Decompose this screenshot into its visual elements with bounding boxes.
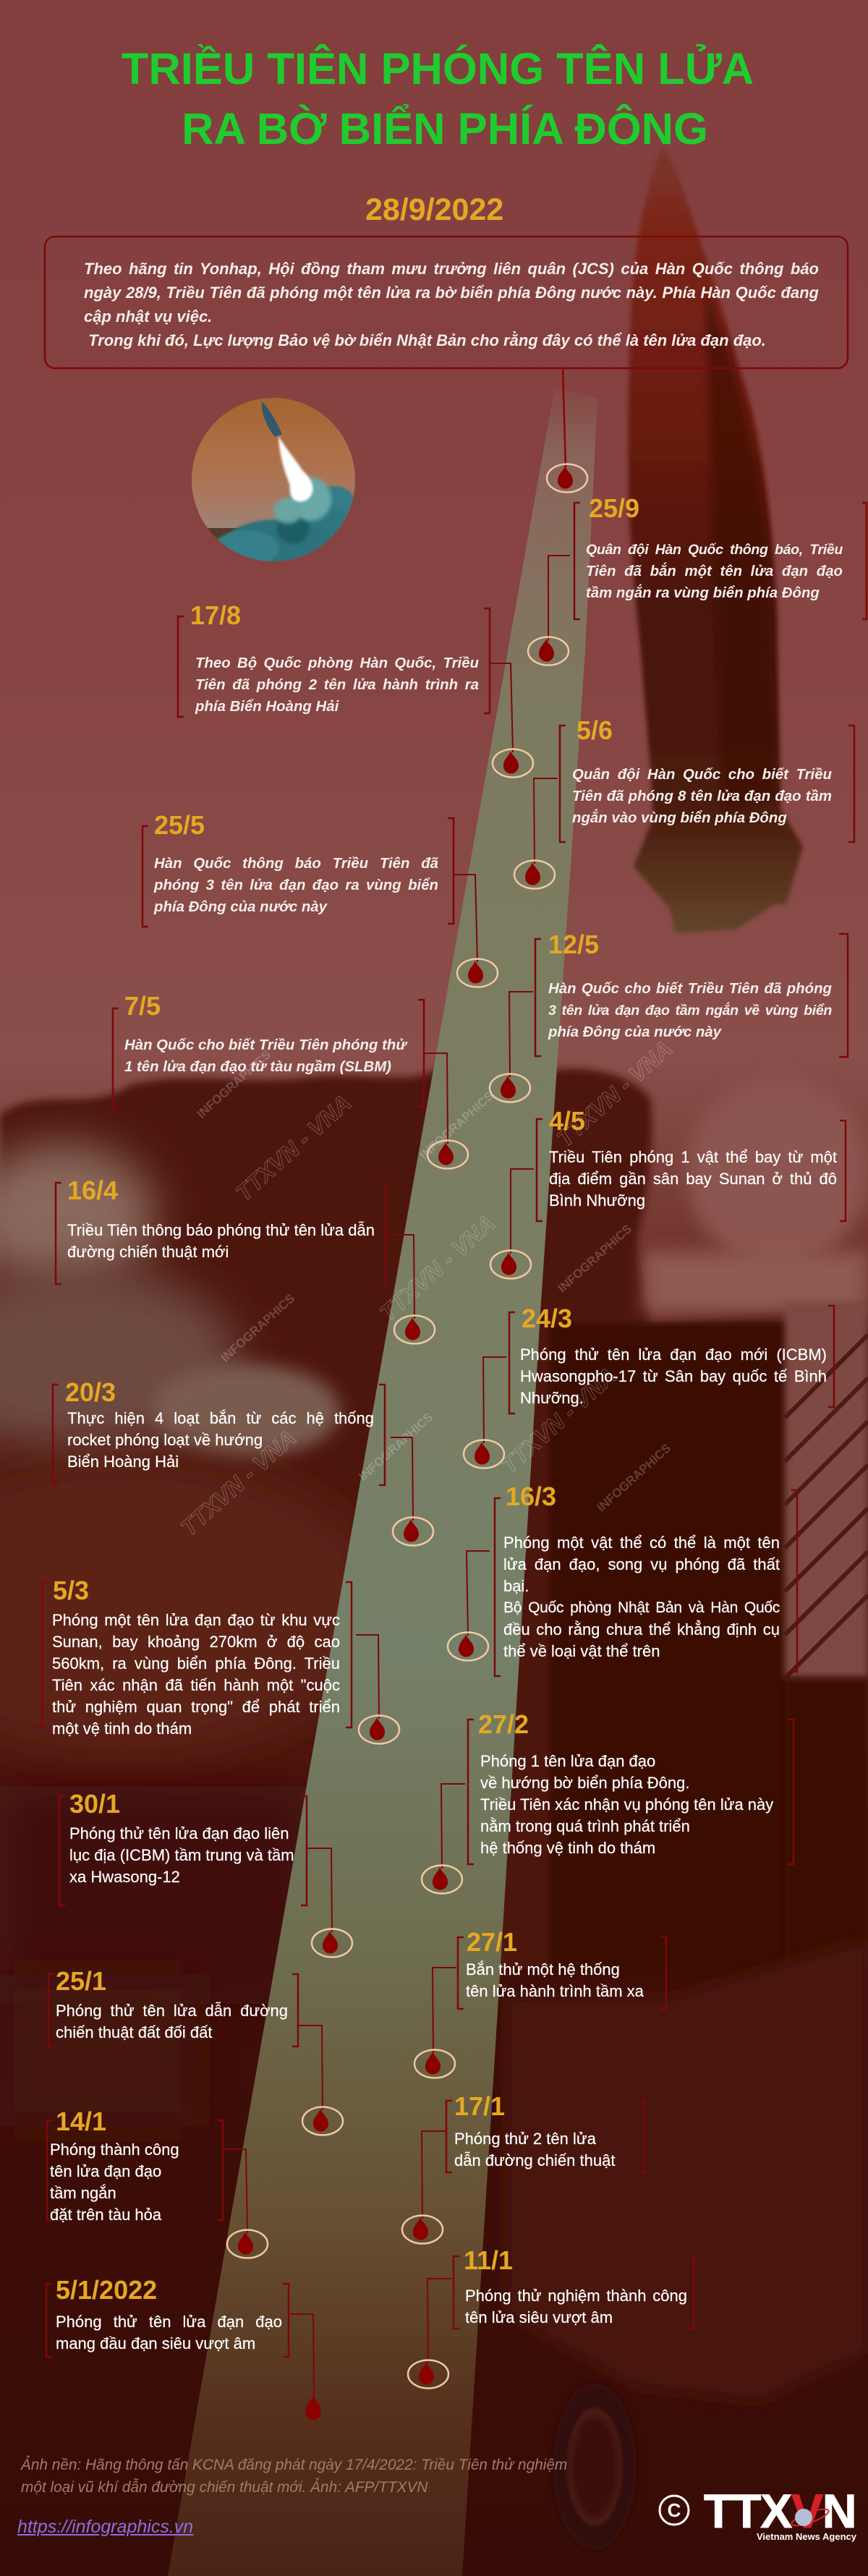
brackets and connector: 11/1 [427,2256,694,2363]
photo: missile launch [188,394,359,566]
source link: https://infographics.vn [17,2517,193,2537]
tagline: Vietnam News Agency [757,2531,856,2542]
marker: 17/1 [402,2215,443,2244]
intro text: cập nhật vụ việc. [84,307,212,326]
title line 2: RA BỜ BIỂN PHÍA ĐÔNG [182,104,708,154]
description: Phóng thử tên lửa dẫn đường [56,2002,288,2020]
watermarks: INFOGRAPHICS [595,1441,673,1515]
brackets and connector: 30/1 [59,1796,332,1932]
description [454,2128,626,2172]
description: bại. [503,1577,529,1595]
description [56,2311,282,2355]
brackets and connector: 16/4 [56,1183,414,1319]
brackets and connector: 24/3 [483,1306,834,1443]
description: Nhưỡng. [520,1389,584,1407]
description: Phóng thành công [50,2141,179,2159]
date heading: 28/9/2022 [365,192,503,227]
date: 24/3 [522,1304,572,1333]
description: Triều Tiên xác nhận vụ phóng tên lửa này [480,1795,773,1814]
event: 30/1 [69,1790,299,1891]
brackets and connector: 25/9 [548,503,867,641]
marker: 5/3 [359,1716,399,1743]
event: 11/1 [464,2246,689,2329]
intro box [45,237,848,368]
background: trees and smoke [0,1068,868,2004]
description [195,655,479,715]
watermarks [176,1035,677,1541]
date: 27/2 [478,1709,529,1739]
date: 30/1 [69,1789,120,1819]
event: 27/2 [478,1710,782,1862]
description: tầm ngắn ra vùng biển phía Đông [586,585,820,601]
description: thể về loại vật thể trên [503,1642,660,1660]
marker: 27/2 [422,1865,462,1894]
description: Triều Tiên phóng 1 vật thể bay từ một [549,1148,837,1166]
description [520,1344,827,1409]
description: tầm ngắn [50,2184,116,2202]
description [586,542,843,601]
marker: 7/5 [427,1140,468,1169]
description: một vệ tinh do thám [52,1720,192,1738]
description: Tiên đã bắn một tên lửa đạn đạo [586,564,843,579]
description: 560km, ra vùng biển phía Đông. Triều [52,1654,340,1672]
event: 20/3 [65,1378,375,1487]
brackets and connector: 4/5 [511,1119,846,1254]
description: phía Đông của nước này [548,1024,721,1040]
copyright sign: C [668,2499,681,2521]
marker: 4/5 [490,1250,531,1279]
description: Phóng thử nghiệm thành công [465,2287,687,2305]
event: 5/1/2022 [56,2276,283,2355]
marker: 28/9 [547,464,587,492]
date: 17/1 [454,2091,505,2121]
description: Phóng thử tên lửa đạn đạo [56,2313,282,2331]
description [56,2000,288,2044]
description [503,1532,780,1662]
marker: 11/1 [408,2360,448,2389]
description [548,981,832,1040]
description: Triều Tiên thông báo phóng thử tên lửa dẫn [67,1221,375,1239]
watermarks: TTXVN - VNA [496,1362,621,1479]
brackets and connector: 17/8 [178,608,513,752]
description [549,1148,837,1210]
date: 25/5 [154,810,205,840]
description: Bộ Quốc phòng Nhật Bản và Hàn Quốc [503,1599,780,1616]
watermarks: INFOGRAPHICS [357,1410,435,1484]
description: rocket phóng loạt về hướng [67,1431,263,1449]
description: Theo Bộ Quốc phòng Hàn Quốc, Triều [195,655,479,671]
date: 16/4 [67,1176,118,1205]
event: 16/3 [503,1482,780,1667]
date: 5/3 [53,1576,89,1605]
description: Hàn Quốc thông báo Triều Tiên đã [154,856,438,872]
description: 1 tên lửa đạn đạo từ tàu ngầm (SLBM) [124,1059,391,1075]
description: địa điểm gần sân bay Sunan ở thủ đô [549,1170,837,1188]
marker: 12/5 [490,1074,530,1102]
description: lửa đạn đạo, song vụ phóng đã thất [503,1555,780,1573]
marker: 5/6 [514,861,555,888]
watermarks: TTXVN - VNA [231,1089,356,1206]
description: Tiên đã phóng 2 tên lửa hành trình ra [195,677,479,693]
brackets and connector: 17/1 [422,2101,644,2219]
intro text: ngày 28/9, Triều Tiên đã phóng một tên lửa ra bờ biển phía Đông nước này. Phía Hàn Quốc đang [84,284,819,302]
brackets and connector: 5/6 [534,726,854,864]
description: Bình Nhưỡng [549,1191,645,1210]
description [52,1610,340,1740]
description: thử nghiệm quan trọng" để phát triển [52,1698,340,1716]
date: 14/1 [56,2107,106,2136]
wordmark: TTXVN [704,2484,856,2538]
title line 1: TRIỀU TIÊN PHÓNG TÊN LỬA [122,44,754,94]
marker: 27/1 [414,2050,455,2078]
brackets and connector: 16/3 [467,1490,797,1676]
date: 17/8 [190,600,241,630]
description: Quân đội Hàn Quốc thông báo, Triều [586,542,843,558]
marker: 24/3 [464,1440,504,1468]
description: ngắn vào vùng biển phía Đông [572,810,787,826]
description: nằm trong quá trình phát triển [480,1817,690,1835]
date: 20/3 [65,1377,116,1407]
date: 25/9 [589,493,639,523]
description: lục địa (ICBM) tầm trung và tầm [69,1846,294,1864]
description: đặt trên tàu hỏa [50,2206,161,2224]
description: Phóng một vật thể có thể là một tên [503,1534,780,1552]
background: rocket silhouette [628,145,803,933]
brackets and connector: 27/1 [433,1937,666,2053]
description [465,2285,687,2329]
intro text: Theo hãng tin Yonhap, Hội đồng tham mưu trưởng liên quân (JCS) của Hàn Quốc thông báo [84,260,819,278]
description [153,856,438,915]
event: 5/6 [572,715,832,826]
description: 3 tên lửa đạn đạo tầm ngắn về vùng biển [548,1003,832,1019]
date: 27/1 [467,1927,517,1957]
event: 14/1 [50,2107,220,2223]
description: Tiên đã phóng 8 tên lửa đạn đạo tầm [572,788,832,804]
marker: 17/8 [493,749,533,777]
brackets and connector: 27/2 [441,1720,793,1869]
description: Hàn Quốc cho biết Triều Tiên đã phóng [548,981,832,997]
description: Biển Hoàng Hải [67,1453,179,1471]
date: 11/1 [464,2245,513,2275]
brackets and connector: 7/5 [113,1000,448,1144]
watermarks: TTXVN - VNA [176,1424,301,1541]
background: truck silhouette [0,1939,868,2550]
description: Thực hiện 4 loạt bắn từ các hệ thống [67,1409,374,1427]
marker: 25/1 [302,2107,343,2135]
description: Hwasongpho-17 từ Sân bay quốc tế Bình [520,1367,827,1385]
connector: intro to 25/9 marker [563,368,566,467]
event: 7/5 [124,991,408,1075]
event: 24/3 [520,1304,828,1413]
watermarks: INFOGRAPHICS [417,1089,496,1162]
description: Phóng thử tên lửa đạn đạo liên [69,1824,289,1842]
description: Phóng thử tên lửa đạn đạo mới (ICBM) [520,1346,827,1364]
date: 7/5 [124,991,161,1021]
description [50,2139,216,2226]
photo credit [21,2454,585,2499]
event: 4/5 [549,1106,837,1210]
date: 16/3 [506,1482,556,1511]
description: đường chiến thuật mới [67,1243,229,1261]
watermarks: TTXVN - VNA [375,1210,500,1326]
description: dẫn đường chiến thuật [454,2151,615,2169]
description: tên lửa siêu vượt âm [465,2308,613,2326]
logo graphics [660,2496,689,2525]
event: 5/3 [52,1576,341,1743]
description [67,1408,374,1473]
watermarks: INFOGRAPHICS [556,1222,634,1296]
description: Sunan, bay khoảng 270km ở độ cao [52,1633,340,1651]
brackets and connector: 5/1/2022 [46,2284,314,2396]
watermarks: INFOGRAPHICS [195,1047,273,1121]
brackets and connector: 5/3 [42,1582,379,1727]
globe emblem [788,2503,832,2532]
brackets and connector: 25/1 [48,1974,323,2110]
description [124,1037,408,1075]
event: 27/1 [466,1928,661,2007]
marker: 20/3 [393,1518,433,1545]
description [67,1221,375,1261]
description: Quân đội Hàn Quốc cho biết Triều [572,767,832,783]
description: xa Hwasong-12 [69,1868,180,1886]
event: 25/9 [586,493,843,601]
description: phía Đông của nước này [154,899,327,915]
brackets and connector: 14/1 [47,2120,247,2233]
description: tên lửa hành trình tầm xa [466,1982,644,2000]
event: 17/8 [190,600,479,715]
description: hệ thống vệ tinh do thám [480,1839,655,1857]
event: 16/4 [67,1176,375,1261]
event: 17/1 [454,2092,628,2172]
description [69,1823,298,1888]
marker: 5/1/2022 [305,2395,321,2420]
description: Phóng một tên lửa đạn đạo từ khu vực [52,1611,340,1629]
description: Hàn Quốc cho biết Triều Tiên phóng thử [124,1037,407,1053]
intro text [84,260,819,349]
event: 25/1 [56,1967,289,2043]
description: phía Biển Hoàng Hải [195,699,339,715]
brackets and connector: 20/3 [53,1385,413,1521]
date: 12/5 [548,930,599,959]
photo credit: một loại vũ khí dẫn đường chiến thuật mới. Ảnh: AFP/TTXVN [21,2479,427,2496]
marker: 16/4 [394,1315,435,1344]
marker: 25/5 [457,959,498,987]
date: 25/1 [56,1966,106,1996]
event: 12/5 [548,930,832,1040]
marker: 16/3 [448,1632,488,1661]
description: chiến thuật đất đối đất [56,2023,213,2041]
photo credit: Ảnh nền: Hãng thông tấn KCNA đăng phát ngày 17/4/2022: Triều Tiên thử nghiệm [21,2457,567,2473]
description: phóng 3 tên lửa đạn đạo ra vùng biển [154,877,438,893]
watermarks: TTXVN - VNA [552,1035,677,1152]
date: 4/5 [549,1106,585,1136]
event: 25/5 [153,810,438,915]
description [480,1751,781,1859]
date: 5/6 [576,715,613,745]
watermarks: INFOGRAPHICS [218,1291,297,1365]
intro text: Trong khi đó, Lực lượng Bảo vệ bờ biển Nhật Bản cho rằng đây có thể là tên lửa đạn đạo. [88,331,766,349]
marker: 30/1 [312,1929,352,1957]
brackets and connector: 12/5 [509,934,848,1077]
description: Phóng 1 tên lửa đạn đạo [480,1752,655,1770]
description: về hướng bờ biển phía Đông. [480,1774,689,1792]
description [572,767,832,826]
brackets and connector: 25/5 [142,818,477,962]
description: Bắn thử một hệ thống [466,1960,620,1978]
marker: 25/9 [528,637,569,666]
description: mang đầu đạn siêu vượt âm [56,2334,255,2352]
light beam [168,386,597,2576]
description: tên lửa đạn đạo [50,2162,161,2180]
description [466,1959,660,2002]
logo: TTXVN [665,2488,857,2543]
marker: 14/1 [227,2229,268,2258]
description: đều cho rằng chưa thể khẳng định cụ [503,1620,780,1638]
description: Phóng thử 2 tên lửa [454,2130,596,2148]
title [122,44,754,154]
date: 5/1/2022 [56,2275,157,2305]
description: Tiên xác nhận đã tiến hành một "cuộc [52,1676,340,1694]
